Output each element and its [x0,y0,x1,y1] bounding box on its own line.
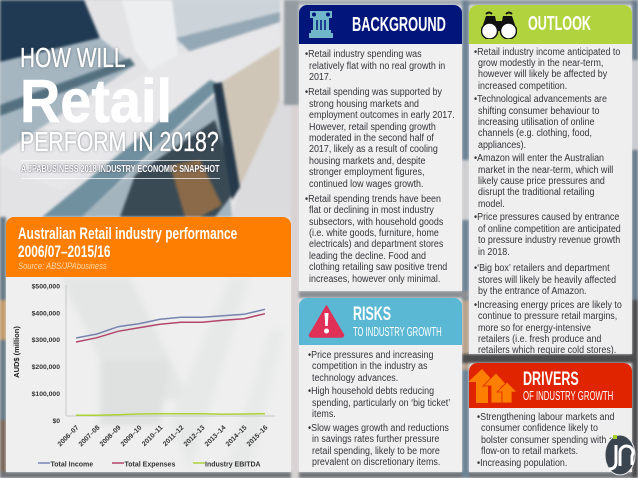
risks heading: RISKS [353,304,391,325]
title line: how will: HOW WILL [20,42,125,73]
x axis labels [57,424,270,448]
drivers bullets: •Increasing population. [477,458,567,468]
icon: binoculars [481,12,517,39]
drivers bullets: bolster consumer spending with a [481,434,614,446]
series: industry EBITDA [76,414,265,415]
x axis labels: 2008–09 [99,424,123,448]
subtitle: A JPABUSINESS 2018 INDUSTRY ECONOMIC SNAPSHOT [21,163,219,175]
outlook bullets: by the entrance of Amazon. [478,286,587,297]
background bullets: •Retail spending trends have been [305,194,441,204]
drivers subheading: OF INDUSTRY GROWTH [523,388,613,403]
outlook bullets: likely cause price pressures and [478,176,605,187]
title block [20,42,220,179]
background bullets: However, retail spending growth [309,122,436,132]
y axis labels [32,284,60,425]
title word: retail: Retail [20,67,172,135]
outlook bullets: stores will likely be heavily affected [478,274,616,286]
y axis title: AUD$ (million) [12,326,21,378]
panel: drivers [469,363,632,472]
x axis labels: 2007–08 [78,424,102,448]
outlook bullets: continue to pressure retail margins, [478,311,617,322]
outlook bullets: shifting consumer behaviour to [478,106,599,116]
risks header [299,298,462,345]
outlook bullets: •Price pressures caused by entrance [474,212,619,223]
background bullets: •Retail industry spending was [305,49,422,60]
outlook bullets: •‘Big box’ retailers and department [474,263,610,274]
outlook bullets: increased competition. [478,80,567,92]
outlook bullets: •Retail industry income anticipated to [474,46,620,58]
drivers heading: DRIVERS [523,369,579,390]
background bullets: continued low wages growth. [309,178,423,190]
series: total income [76,309,265,338]
risks bullets: retail spending, likely to be more [312,446,440,456]
background bullets: clothing retailing saw positive trend [309,262,447,273]
drivers bullets: •Strengthening labour markets and [477,412,614,422]
legend: Industry EBITDA [205,462,261,468]
drivers header [469,363,632,408]
drivers bullets: flow-on to retail markets. [481,446,578,457]
outlook bullets [474,46,622,354]
y axis labels: $0 [52,418,60,425]
title line: perform in 2018: PERFORM IN 2018? [20,126,219,157]
risks bullets: •High household debts reducing [308,386,434,397]
background bullets: increases, however only minimal. [309,274,440,284]
chart heading text [18,225,237,261]
y axis labels: $200,000 [32,364,60,371]
background bullets: (i.e. white goods, furniture, home [309,228,439,239]
background bullets: relatively flat with no real growth in [309,60,445,72]
y axis labels: $100,000 [32,391,60,398]
background bullets: electricals) and department stores [309,239,443,250]
background bullets [305,49,455,284]
outlook bullets: •Technological advancements are [474,94,607,105]
x axis labels: 2015–16 [246,424,270,448]
outlook bullets: market in the near-term, which will [478,164,613,176]
chart heading text: Australian Retail industry performance [18,225,237,243]
outlook bullets: retailers (i.e. fresh produce and [478,334,601,344]
background bullets: 2017. [309,72,331,83]
background bullets: stronger employment figures, [309,167,424,178]
panel: chart heading [6,217,291,277]
outlook bullets: more so for energy-intensive [478,322,591,334]
risks bullets: spending, particularly on ‘big ticket’ [312,398,450,408]
x axis labels: 2011–12 [162,424,186,448]
background bullets: strong housing markets and [309,98,419,110]
background bullets: subsectors, with household goods [309,216,443,228]
risks bullets: •Slow wages growth and reductions [308,423,449,434]
outlook bullets: •Amazon will enter the Australian [474,153,604,164]
background bullets: moderated in the second half of [309,132,434,144]
risks bullets: items. [312,409,336,420]
legend [38,462,261,468]
source note: Source: ABS/JPAbusiness [18,261,107,272]
background bullets: •Retail spending was supported by [305,87,442,98]
outlook bullets: increasing utilisation of online [478,117,594,128]
outlook heading: OUTLOOK [528,13,591,35]
outlook header [469,5,632,44]
series: total expenses [76,314,265,342]
outlook bullets: appliances). [478,140,526,150]
panel: outlook [469,5,632,354]
risks subheading: TO INDUSTRY GROWTH [353,324,442,339]
chart heading text: 2006/07–2015/16 [18,243,110,261]
outlook bullets: however will likely be affected by [478,69,607,80]
risks bullets: in savings rates further pressure [312,434,439,445]
legend: Total Expenses [124,462,175,468]
y axis labels: $500,000 [32,284,60,290]
x axis labels: 2006–07 [57,424,81,448]
x axis labels: 2010–11 [141,424,165,448]
risks bullets: technology advances. [312,372,398,384]
outlook bullets: grow modestly in the near-term, [478,58,603,69]
risks bullets: competition in the industry as [312,361,427,372]
background bullets: employment outcomes in early 2017. [309,110,455,121]
outlook bullets: disrupt the traditional retailing [478,187,594,198]
risks bullets: •Price pressures and increasing [308,350,434,360]
panel: line chart [6,277,291,472]
background bullets: leading the decline. Food and [309,250,426,262]
icon: warning triangle [308,305,344,338]
outlook bullets: to pressure industry revenue growth [478,235,620,246]
y axis labels: $300,000 [32,337,60,344]
icon: column [309,11,333,38]
background bullets: flat or declining in most industry [309,205,434,216]
background header [299,5,462,44]
x axis labels: 2013–14 [204,424,228,448]
outlook bullets: of online competition are anticipated [478,224,621,234]
background bullets: housing markets and, despite [309,156,425,166]
background heading: BACKGROUND [352,14,446,36]
logo: jp [606,435,636,476]
x axis labels: 2012–13 [183,424,207,448]
panel: risks [299,298,462,472]
risks bullets: prevalent on discretionary items. [312,457,440,468]
outlook bullets: channels (e.g. clothing, food, [478,128,592,139]
risks bullets [308,350,450,468]
outlook bullets: in 2018. [478,246,510,258]
outlook bullets: model. [478,198,505,210]
legend: Total Income [50,462,93,468]
subtitle [21,160,220,179]
icon: rising arrows [469,369,516,403]
drivers bullets: consumer confidence likely to [481,423,598,434]
drivers bullets [477,412,614,468]
outlook bullets: •Increasing energy prices are likely to [474,300,622,310]
x axis labels: 2009–10 [120,424,144,448]
background bullets: 2017, likely as a result of cooling [309,144,438,155]
y axis labels: $400,000 [32,310,60,318]
x axis labels: 2014–15 [225,424,249,448]
panel: background [299,5,462,291]
